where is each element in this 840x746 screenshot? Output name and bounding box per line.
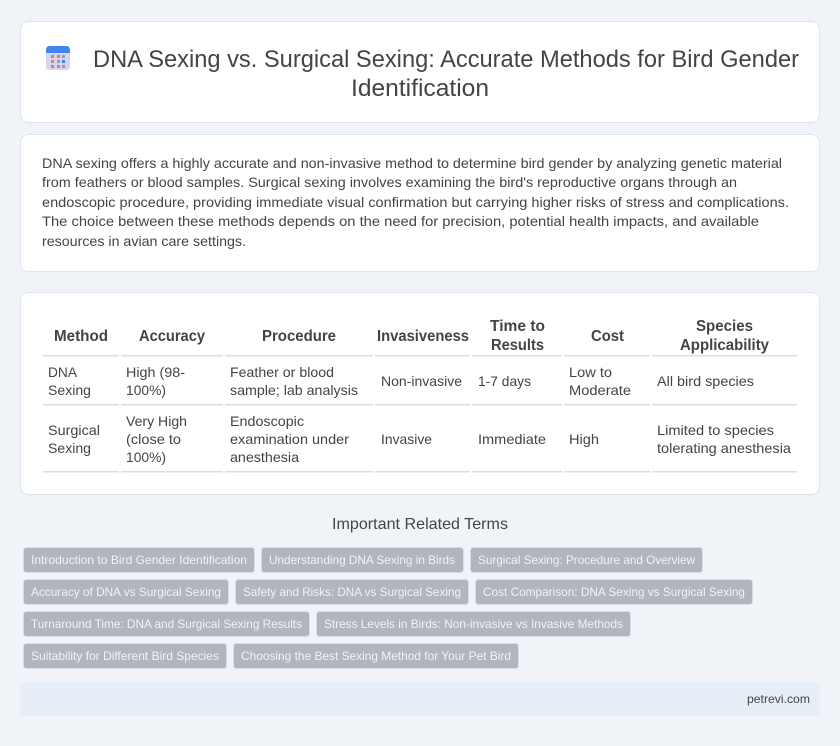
table row: Surgical Sexing: examination under (230, 431, 349, 447)
footer (20, 682, 820, 716)
table row: DNA Sexing (48, 364, 754, 398)
table row: DNA Sexing: sample; lab analysis (230, 382, 358, 398)
tag (236, 580, 468, 604)
table row: DNA Sexing: Feather or blood (230, 364, 334, 380)
text block: intro paragraph: The choice between these methods depends on the need for precision, potential health impacts, and available (42, 213, 759, 229)
table row: Surgical Sexing: High (569, 431, 599, 447)
tag (476, 580, 752, 604)
title: Identification (351, 75, 489, 102)
text block: intro paragraph: from feathers or blood samples. Surgical sexing involves examining the bird's reproductive organs through an (42, 174, 737, 190)
tag: Stress Levels in Birds: Non-invasive vs Invasive Methods (324, 617, 623, 631)
table row: Surgical Sexing: Invasive (381, 431, 432, 447)
text block: intro paragraph: endoscopic procedure, providing immediate visual confirmation but carrying higher risks of stress and complications. (42, 194, 789, 210)
table row: Surgical Sexing: Surgical (48, 422, 100, 438)
table row: Surgical Sexing: (close to (126, 431, 181, 447)
table row: Surgical Sexing: anesthesia (230, 449, 299, 465)
table row: Surgical Sexing: 100%) (126, 449, 166, 465)
text block: intro paragraph (42, 155, 789, 249)
related term tags (24, 548, 752, 668)
table row: DNA Sexing: DNA (48, 364, 78, 380)
tag (24, 612, 310, 636)
table row: Surgical Sexing: Endoscopic (230, 413, 304, 429)
title (93, 46, 799, 102)
table header row: Accuracy (139, 328, 205, 345)
table header row: Cost (591, 328, 625, 345)
tag (24, 580, 228, 604)
panel: header card (20, 22, 820, 122)
tag: Introduction to Bird Gender Identification (31, 553, 247, 567)
text block: intro paragraph: resources in avian care settings. (42, 233, 246, 249)
tag: Choosing the Best Sexing Method for Your Pet Bird (241, 649, 511, 663)
title: DNA Sexing vs. Surgical Sexing: Accurate Methods for Bird Gender (93, 46, 799, 73)
table header row: Method (54, 328, 108, 345)
tag (24, 644, 226, 668)
table row: DNA Sexing: 100%) (126, 382, 166, 398)
table row: DNA Sexing: Moderate (569, 382, 631, 398)
tag: Turnaround Time: DNA and Surgical Sexing Results (31, 617, 302, 631)
text block: intro paragraph: DNA sexing offers a highly accurate and non-invasive method to determine bird gender by analyzing genetic material (42, 155, 782, 171)
tag: Understanding DNA Sexing in Birds (269, 553, 455, 567)
footer: petrevi.com (747, 692, 810, 706)
panel: intro paragraph card (20, 134, 820, 272)
tag (234, 644, 518, 668)
table header row: Procedure (262, 328, 336, 345)
table row: Surgical Sexing: Very High (126, 413, 187, 429)
table row: DNA Sexing: All bird species (657, 373, 754, 389)
table header row: Species (696, 318, 753, 335)
table row: Surgical Sexing (48, 413, 791, 465)
tag: Suitability for Different Bird Species (31, 649, 219, 663)
table row: DNA Sexing: Low to (569, 364, 612, 380)
panel: comparison table card (20, 292, 820, 494)
table row: Surgical Sexing: tolerating anesthesia (657, 440, 791, 456)
table row: DNA Sexing: 1-7 days (478, 373, 531, 389)
tag (262, 548, 464, 572)
tag: Safety and Risks: DNA vs Surgical Sexing (243, 585, 461, 599)
table header row: Time to (490, 318, 545, 335)
table row: DNA Sexing: High (98- (126, 364, 185, 380)
tag (316, 612, 630, 636)
tag: Accuracy of DNA vs Surgical Sexing (31, 585, 221, 599)
heading: Important Related Terms: Important Related Terms (332, 516, 508, 533)
table header row (54, 318, 769, 354)
table header row: Results (491, 337, 544, 354)
table header row: Applicability (680, 337, 769, 354)
table row: Surgical Sexing: Sexing (48, 440, 91, 456)
table row: Surgical Sexing: Limited to species (657, 422, 774, 438)
icon: calendar (46, 46, 70, 70)
tag (470, 548, 702, 572)
table row: DNA Sexing: Non-invasive (381, 373, 462, 389)
table header row: Invasiveness (377, 328, 469, 345)
tag (24, 548, 254, 572)
table row: DNA Sexing: Sexing (48, 382, 91, 398)
tag: Surgical Sexing: Procedure and Overview (478, 553, 695, 567)
tag: Cost Comparison: DNA Sexing vs Surgical Sexing (483, 585, 745, 599)
table row: Surgical Sexing: Immediate (478, 431, 546, 447)
